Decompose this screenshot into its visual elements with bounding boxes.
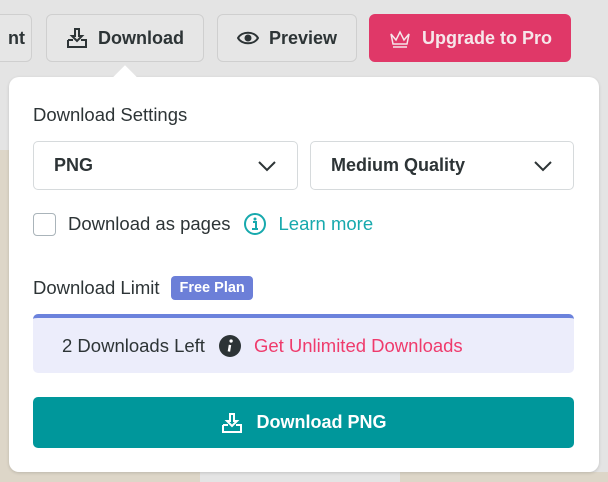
button: partial: [0, 14, 32, 62]
checkbox row: [33, 213, 373, 236]
popover panel: [9, 77, 599, 472]
button: preview: Preview: [269, 28, 337, 48]
select: format: PNG: [54, 155, 93, 175]
label: download limit: Download Limit: [33, 277, 159, 298]
button: partial: nt: [8, 28, 25, 48]
label: download limit: Free Plan: [179, 280, 245, 296]
button: download png: [33, 397, 574, 448]
select: quality: [310, 141, 574, 190]
button: upgrade to pro: Upgrade to Pro: [422, 28, 552, 48]
label: download limit: [33, 276, 253, 300]
button: preview: [217, 14, 357, 62]
checkbox row: Learn more: [278, 213, 373, 234]
button: download: [46, 14, 204, 62]
button: download png: Download PNG: [256, 412, 386, 432]
downloads left box: [33, 314, 574, 373]
downloads left box: Get Unlimited Downloads: [254, 334, 463, 356]
select: format: [33, 141, 298, 190]
popover arrow: [112, 65, 138, 91]
checkbox row: Download as pages: [68, 213, 230, 234]
downloads left box: 2 Downloads Left: [62, 334, 205, 356]
heading: download settings: Download Settings: [33, 104, 187, 125]
select: quality: Medium Quality: [331, 155, 465, 175]
button: download: Download: [98, 28, 184, 48]
button: upgrade to pro: [369, 14, 571, 62]
background canvas: [0, 150, 200, 482]
